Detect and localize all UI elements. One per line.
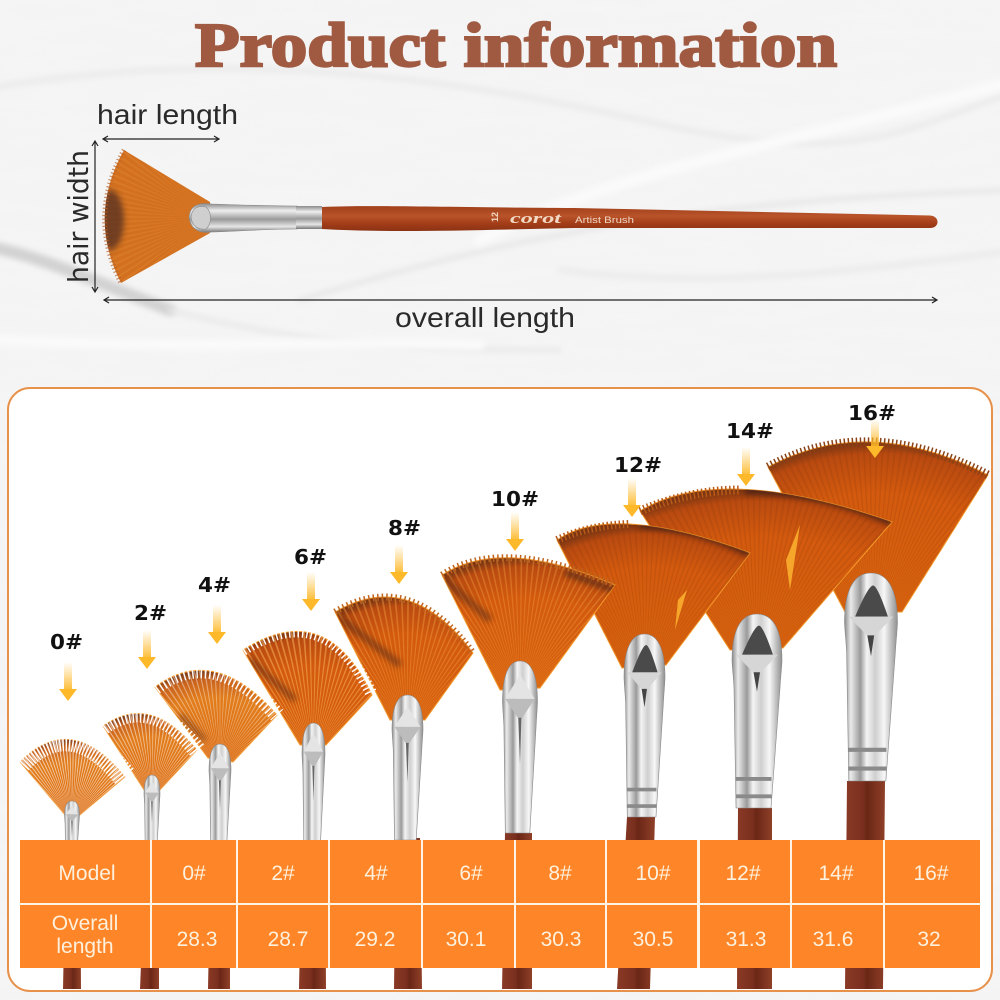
title: Product information	[195, 12, 837, 80]
brush bristles	[102, 148, 210, 284]
brush handle	[322, 206, 938, 231]
table text: 8#	[548, 862, 572, 885]
arrow: hair length	[103, 136, 219, 142]
table text: 10#	[635, 862, 671, 885]
label 14#: 14#	[726, 419, 774, 443]
label 12#: 12#	[614, 453, 662, 477]
label 8#	[388, 516, 421, 584]
brush print: corot	[510, 211, 562, 227]
brush 8#	[335, 597, 477, 989]
spec table	[20, 840, 980, 968]
brush 12#	[557, 524, 750, 989]
table text: 4#	[364, 862, 388, 885]
label 14#	[726, 419, 774, 486]
label 2#	[134, 601, 167, 669]
label 16#	[848, 401, 896, 458]
arrow: overall length	[104, 297, 937, 303]
brush 2#	[103, 713, 197, 989]
product brush diagram	[62, 99, 938, 333]
table text: Model	[58, 862, 116, 885]
brush ferrule	[189, 204, 322, 232]
label 6#: 6#	[294, 545, 327, 569]
table text: 31.6	[813, 928, 853, 951]
brush 16#	[768, 442, 988, 989]
label 10#: 10#	[491, 487, 539, 511]
brush 14#	[640, 489, 892, 989]
table text: 30.5	[633, 928, 673, 951]
table text: 32	[917, 928, 941, 951]
label 2#: 2#	[134, 601, 167, 625]
table text: 31.3	[726, 928, 766, 951]
table text: 12#	[725, 862, 761, 885]
label: hair width: hair width	[62, 150, 95, 283]
label 12#	[614, 453, 662, 517]
table text: 14#	[818, 862, 854, 885]
table text: 28.3	[177, 928, 217, 951]
table text: 28.7	[268, 928, 308, 951]
label 16#: 16#	[848, 401, 896, 425]
brush 4#	[155, 670, 277, 989]
panel: brush sizes	[8, 388, 992, 991]
label 6#	[294, 545, 327, 611]
brush 0#	[20, 739, 125, 989]
label: hair length: hair length	[97, 99, 238, 130]
label: overall length: overall length	[395, 302, 575, 333]
brush print: Artist Brush	[575, 215, 634, 226]
brush 10#	[442, 558, 615, 989]
table text: 0#	[182, 862, 206, 885]
brush print: 12	[490, 212, 500, 222]
label 4#: 4#	[198, 573, 231, 597]
table text: 29.2	[355, 928, 395, 951]
table text	[52, 862, 949, 958]
table text: Overall	[52, 912, 118, 935]
label 0#: 0#	[50, 630, 83, 654]
label 8#: 8#	[388, 516, 421, 540]
size labels and arrows	[50, 401, 896, 701]
brush print	[490, 211, 634, 227]
brush 6#	[243, 631, 378, 989]
label 4#	[198, 573, 231, 644]
label 0#	[50, 630, 83, 701]
table text: 2#	[271, 862, 295, 885]
table text: 30.3	[541, 928, 581, 951]
table text: 16#	[913, 862, 949, 885]
table text: 6#	[459, 862, 483, 885]
table text: length	[56, 935, 114, 958]
arrow: hair width	[92, 141, 98, 292]
table text: 30.1	[446, 928, 486, 951]
label 10#	[491, 487, 539, 551]
